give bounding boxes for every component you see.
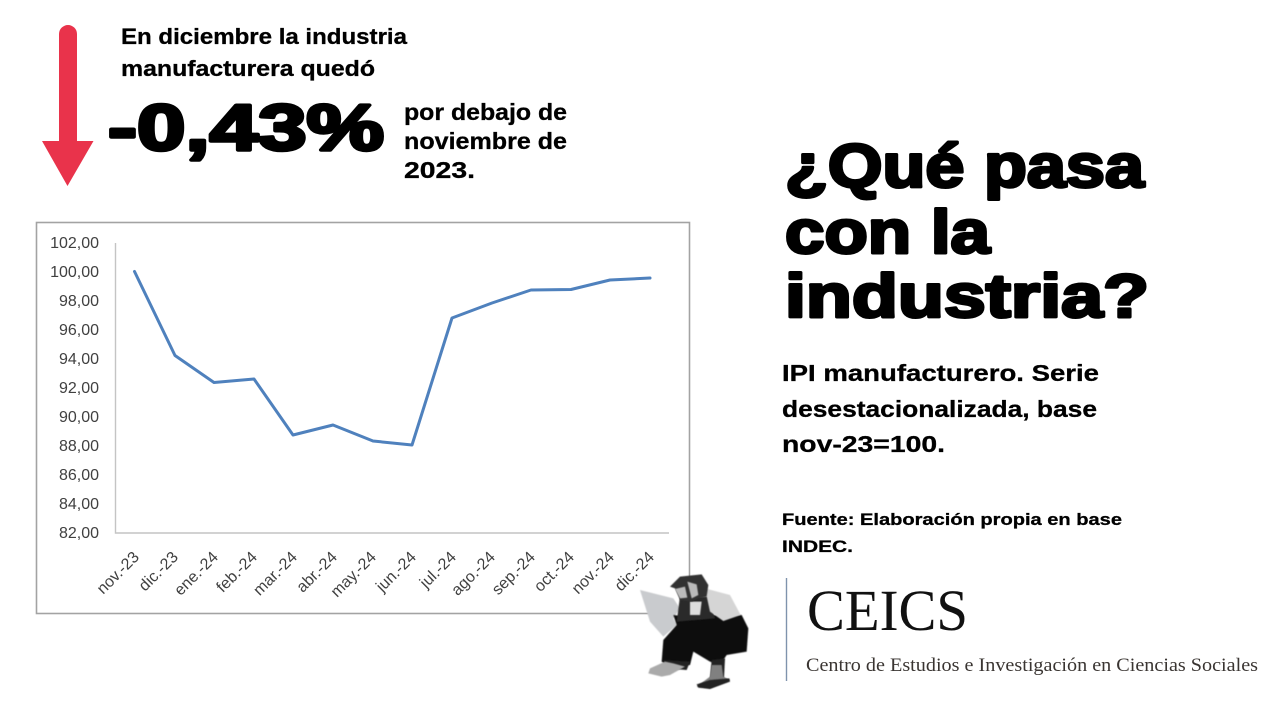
x axis labels: nov.-23: [94, 549, 143, 598]
x axis labels: abr.-24: [294, 549, 341, 596]
y axis labels: 98,00: [59, 293, 99, 310]
figure note: [404, 99, 567, 183]
subtitle: [782, 360, 1099, 457]
panel: line chart: [36, 222, 690, 614]
title: con la: [785, 198, 991, 266]
subtitle: desestacionalizada, base: [782, 396, 1097, 422]
figure note: por debajo de: [404, 99, 567, 125]
intro text: manufacturera quedó: [121, 56, 375, 81]
key figure: -0,43%: -0,43%: [108, 91, 384, 164]
x axis labels: feb.-24: [214, 549, 261, 596]
y axis labels: 90,00: [59, 409, 99, 426]
logo tagline: Centro de Estudios e Investigación en Ciencias Sociales: [806, 655, 1258, 676]
subtitle: IPI manufacturero. Serie: [782, 360, 1099, 386]
y axis labels: 84,00: [59, 496, 99, 513]
y axis labels: 86,00: [59, 467, 99, 484]
y axis labels: 82,00: [59, 525, 99, 542]
x axis labels: may.-24: [328, 549, 380, 601]
x axis labels: oct.-24: [531, 549, 578, 595]
source note: Fuente: Elaboración propia en base: [782, 510, 1122, 529]
figure note: 2023.: [404, 157, 475, 183]
x axis labels: nov.-24: [569, 549, 618, 598]
source note: INDEC.: [782, 537, 853, 556]
y axis labels: 102,00: [50, 235, 99, 252]
data line: [134, 272, 650, 445]
chart axes: [116, 243, 669, 533]
y axis labels: 100,00: [50, 264, 99, 281]
logo: CEICS: [786, 578, 1258, 681]
figure note: noviembre de: [404, 128, 567, 154]
y axis labels: 94,00: [59, 351, 99, 368]
y axis labels: [50, 235, 99, 542]
y axis labels: 92,00: [59, 380, 99, 397]
source note: [782, 510, 1122, 556]
x axis labels: ago.-24: [448, 549, 499, 599]
y axis labels: 96,00: [59, 322, 99, 339]
x axis labels: ene.-24: [171, 549, 222, 599]
icon: two workers reading a map: [638, 574, 750, 690]
intro text: En diciembre la industria: [121, 24, 408, 49]
logo wordmark: CEICS: [807, 578, 968, 643]
x axis labels: dic.-24: [612, 549, 658, 595]
x axis labels: dic.-23: [136, 549, 182, 595]
x axis labels: jul.-24: [416, 549, 460, 592]
x axis labels: mar.-24: [250, 549, 301, 599]
title: ¿Qué pasa: [785, 132, 1145, 200]
title: [785, 132, 1149, 330]
x axis labels: sep.-24: [489, 549, 539, 599]
subtitle: nov-23=100.: [782, 431, 945, 457]
x axis labels: jun.-24: [373, 549, 420, 596]
x axis labels: [94, 549, 658, 601]
intro text: [121, 24, 408, 81]
icon: red down arrow: [42, 25, 94, 186]
logo divider: [786, 578, 788, 681]
y axis labels: 88,00: [59, 438, 99, 455]
title: industria?: [785, 262, 1149, 330]
